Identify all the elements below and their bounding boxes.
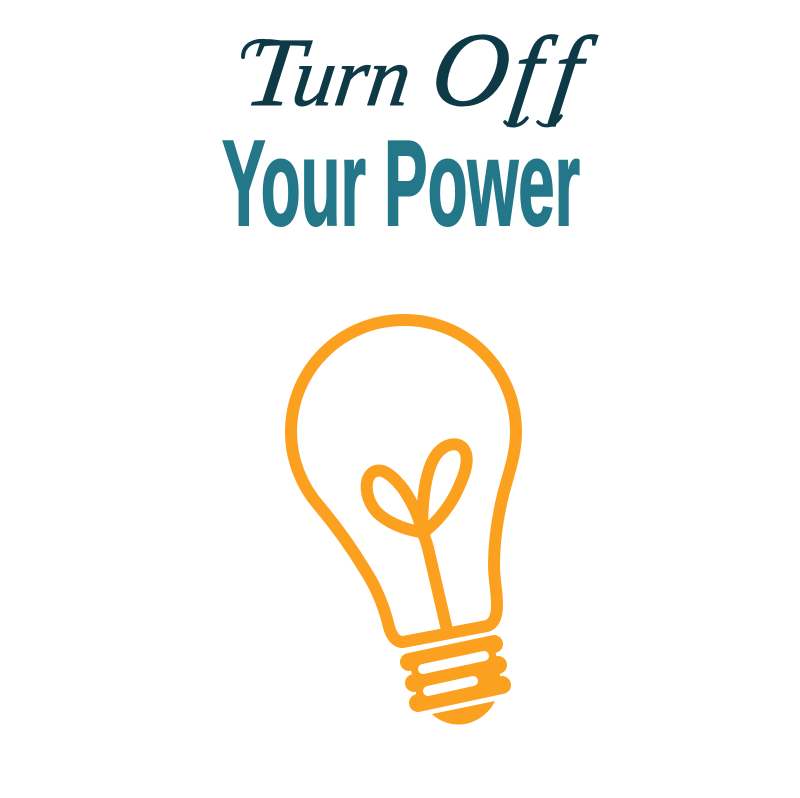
- filament: [367, 444, 467, 630]
- bulb glass outline: [291, 320, 516, 642]
- title: Turn Off: ff: [506, 15, 601, 127]
- bulb tip: [432, 701, 495, 725]
- title: Turn Off: [240, 11, 602, 129]
- title: Turn Off: urn: [287, 31, 417, 124]
- icon: light bulb: [291, 320, 516, 725]
- title: Turn Off: O: [425, 11, 518, 129]
- screw base: [409, 644, 502, 703]
- title: Turn Off: T: [240, 18, 316, 127]
